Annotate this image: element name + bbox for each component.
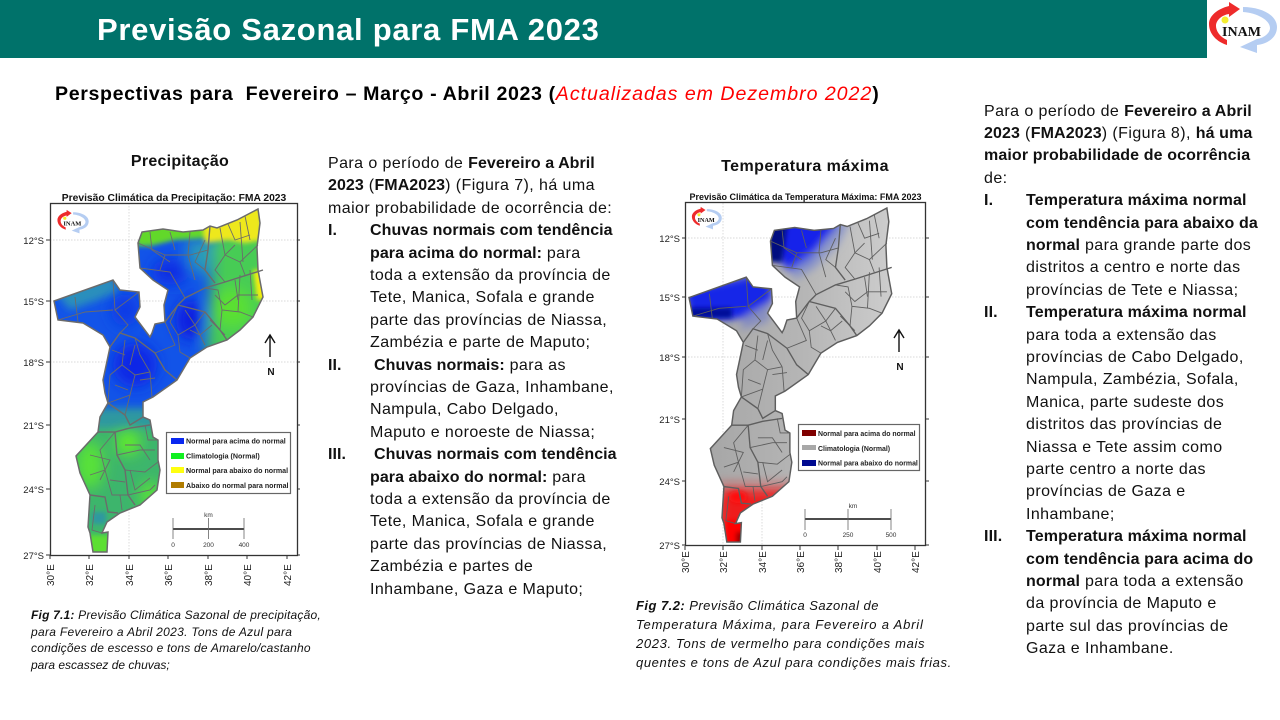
y axis labels: precipitation map xyxy=(23,236,44,562)
caption: figure 7.1: para Fevereiro a Abril 2023. Tons de Azul para xyxy=(31,625,292,639)
text block: temperature outlook: II. xyxy=(984,304,998,321)
x axis labels: temperature map: 36°E xyxy=(796,551,807,573)
header banner xyxy=(0,0,1280,58)
text block: precipitation outlook: toda a extensão da província de xyxy=(370,267,611,284)
legend: precipitation: Normal para acima do normal xyxy=(186,438,286,446)
text block: temperature outlook: províncias de Gaza e xyxy=(1026,483,1186,500)
x axis labels: temperature map: 30°E xyxy=(681,551,692,573)
heading: temperature map: Temperatura máxima xyxy=(721,158,889,175)
caption: figure 7.2: Temperatura Máxima, para Fevereiro a Abril xyxy=(636,617,924,632)
scale bar: precipitation map: km xyxy=(204,512,213,519)
caption: figure 7.1: para escassez de chuvas; xyxy=(31,658,170,672)
x axis labels: temperature map xyxy=(681,551,922,573)
text block: precipitation outlook: 2023 (FMA2023) (Figura 7), há uma xyxy=(328,177,595,194)
x axis labels: precipitation map: 38°E xyxy=(204,564,215,586)
caption: figure 7.1: condições de escesso e tons de Amarelo/castanho xyxy=(31,641,311,655)
text block: precipitation outlook: para abaixo do normal: para xyxy=(370,469,586,486)
x axis labels: precipitation map: 30°E xyxy=(46,564,57,586)
text block: temperature outlook: distritos das províncias de xyxy=(1026,416,1222,433)
text block: precipitation outlook xyxy=(328,155,617,598)
text block: precipitation outlook: Chuvas normais: para as xyxy=(374,357,566,374)
heading: precipitation map: Precipitação xyxy=(131,153,229,170)
text block: precipitation outlook: Zambézia e parte de Maputo; xyxy=(370,334,590,351)
map fill: temperature colours xyxy=(690,210,891,542)
text block: temperature outlook: Temperatura máxima normal xyxy=(1026,304,1247,321)
text block: temperature outlook: distritos a centro e norte das xyxy=(1026,259,1240,276)
caption: figure 7.1: Fig 7.1: Previsão Climática Sazonal de precipitação, xyxy=(31,608,321,622)
axes frame: temperature map xyxy=(682,202,929,550)
text block: temperature outlook: com tendência para acima do xyxy=(1026,550,1253,568)
scale bar: temperature map: 500 xyxy=(886,532,897,539)
map lines: provinces and districts xyxy=(54,209,263,552)
text block: precipitation outlook: III. xyxy=(328,446,346,463)
north arrow: temperature map: N xyxy=(896,362,904,373)
text block: precipitation outlook: Inhambane, Gaza e Maputo; xyxy=(370,581,583,598)
text block: temperature outlook: Inhambane; xyxy=(1026,506,1115,523)
y axis labels: temperature map: 21°S xyxy=(659,415,680,426)
title: Previsão Sazonal para FMA 2023 xyxy=(97,12,600,47)
legend: precipitation: Climatologia (Normal) xyxy=(186,452,260,460)
text block: precipitation outlook: Chuvas normais com tendência xyxy=(374,446,617,463)
caption: figure 7.1 xyxy=(30,608,321,672)
text block: precipitation outlook: Para o período de Fevereiro a Abril xyxy=(328,155,595,172)
scale bar: precipitation map: 0 xyxy=(171,542,175,549)
x axis labels: temperature map: 32°E xyxy=(719,551,730,573)
north arrow: precipitation map: N xyxy=(267,367,275,378)
text block: temperature outlook: parte sul das províncias de xyxy=(1026,618,1229,635)
scale bar: precipitation map: 200 xyxy=(203,542,214,549)
grid lines: precipitation map xyxy=(50,203,297,555)
map lines: provinces and districts xyxy=(689,208,892,542)
text block: temperature outlook: Manica, parte sudeste dos xyxy=(1026,394,1224,411)
map: seasonal maximum temperature forecast xyxy=(659,192,929,573)
icon: INAM logo on precipitation map: INAM xyxy=(63,221,81,228)
y axis labels: precipitation map: 24°S xyxy=(23,485,44,496)
x axis labels: temperature map: 34°E xyxy=(758,551,769,573)
legend: temperature: Normal para acima do normal xyxy=(818,431,916,438)
text block: temperature outlook: normal para grande parte dos xyxy=(1026,237,1251,254)
legend: precipitation: Abaixo do normal para normal xyxy=(186,482,289,490)
text block: precipitation outlook: toda a extensão da província de xyxy=(370,491,611,508)
y axis labels: precipitation map: 12°S xyxy=(23,236,44,247)
y axis labels: temperature map: 24°S xyxy=(659,477,680,488)
caption: figure 7.2: Fig 7.2: Previsão Climática Sazonal de xyxy=(636,598,879,612)
text block: temperature outlook: normal para toda a extensão xyxy=(1026,573,1244,590)
subtitle heading: Perspectivas para Fevereiro – Março - Abril 2023 (Actualizadas em Dezembro 2022) xyxy=(55,83,879,105)
text block: precipitation outlook: para acima do normal: para xyxy=(370,245,581,262)
y axis labels: precipitation map: 15°S xyxy=(23,297,44,308)
text block: precipitation outlook: parte das províncias de Niassa, xyxy=(370,312,607,329)
text block: temperature outlook: Niassa e Tete assim como xyxy=(1026,438,1223,456)
scale bar: temperature map: 250 xyxy=(843,532,854,539)
text block: temperature outlook: maior probabilidade de ocorrência xyxy=(984,147,1250,164)
y axis labels: temperature map: 18°S xyxy=(659,353,680,364)
caption: figure 7.2 xyxy=(636,598,952,670)
x axis labels: temperature map: 38°E xyxy=(834,551,845,573)
scale bar: temperature map xyxy=(803,503,897,539)
text block: temperature outlook: Temperatura máxima normal xyxy=(1026,192,1247,209)
text block: temperature outlook: províncias de Tete e Niassa; xyxy=(1026,282,1238,299)
icon: INAM logo on temperature map xyxy=(692,207,722,229)
text block: precipitation outlook: I. xyxy=(328,222,337,239)
scale bar: temperature map: 0 xyxy=(803,532,807,539)
map: seasonal precipitation forecast xyxy=(24,194,929,586)
text block: temperature outlook: de: xyxy=(984,170,1008,187)
caption: figure 7.2: quentes e tons de Azul para condições mais frias. xyxy=(636,655,952,670)
scale bar: precipitation map: 400 xyxy=(239,542,250,549)
text block: temperature outlook: com tendência para abaixo da xyxy=(1026,214,1258,232)
scale bar: temperature map: km xyxy=(849,503,857,510)
y axis labels: temperature map: 15°S xyxy=(659,293,680,304)
text block: precipitation outlook: Chuvas normais com tendência xyxy=(370,222,613,239)
text block: precipitation outlook: Nampula, Cabo Delgado, xyxy=(370,401,559,418)
y axis labels: temperature map: 27°S xyxy=(659,541,680,552)
north arrow: precipitation map xyxy=(265,335,275,378)
x axis labels: precipitation map: 42°E xyxy=(283,564,294,586)
grid lines: temperature map xyxy=(685,203,926,545)
chart title: precipitation: Previsão Climática da Precipitação: FMA 2023 xyxy=(62,193,287,204)
text block: precipitation outlook: parte das províncias de Niassa, xyxy=(370,536,607,553)
legend: temperature xyxy=(798,424,920,470)
text block: precipitation outlook: Tete, Manica, Sofala e grande xyxy=(370,513,595,530)
x axis labels: precipitation map: 32°E xyxy=(85,564,96,586)
x axis labels: precipitation map: 34°E xyxy=(125,564,136,586)
x axis labels: precipitation map xyxy=(46,564,294,586)
text block: temperature outlook: Temperatura máxima normal xyxy=(1026,528,1247,545)
text block: temperature outlook: da província de Maputo e xyxy=(1026,595,1217,612)
text block: temperature outlook: parte centro a norte das xyxy=(1026,461,1206,478)
x axis labels: temperature map: 42°E xyxy=(911,551,922,573)
text block: precipitation outlook: Tete, Manica, Sofala e grande xyxy=(370,289,595,306)
text block: temperature outlook: III. xyxy=(984,528,1002,545)
text block: temperature outlook: para toda a extensão das xyxy=(1026,326,1217,344)
text block: temperature outlook: 2023 (FMA2023) (Figura 8), há uma xyxy=(984,125,1252,142)
x axis labels: precipitation map: 36°E xyxy=(164,564,175,586)
legend: temperature: Climatologia (Normal) xyxy=(818,446,890,453)
y axis labels: temperature map: 12°S xyxy=(659,234,680,245)
north arrow: temperature map xyxy=(894,330,904,373)
text block: temperature outlook: Gaza e Inhambane. xyxy=(1026,640,1174,657)
text block: precipitation outlook: províncias de Gaza, Inhambane, xyxy=(370,379,614,396)
x axis labels: precipitation map: 40°E xyxy=(243,564,254,586)
legend: precipitation xyxy=(166,432,290,494)
y axis labels: precipitation map: 18°S xyxy=(23,358,44,369)
caption: figure 7.2: 2023. Tons de vermelho para condições mais xyxy=(636,636,925,651)
chart title: temperature: Previsão Climática da Temperatura Máxima: FMA 2023 xyxy=(689,192,922,202)
scale bar: precipitation map xyxy=(171,512,250,549)
text block: precipitation outlook: maior probabilidade de ocorrência de: xyxy=(328,200,612,217)
text block: temperature outlook: I. xyxy=(984,192,993,209)
text block: precipitation outlook: Maputo e noroeste de Niassa; xyxy=(370,424,595,441)
icon: INAM logo on precipitation map xyxy=(57,210,89,233)
y axis labels: precipitation map: 21°S xyxy=(23,421,44,432)
text block: precipitation outlook: II. xyxy=(328,357,342,374)
text block: temperature outlook: Nampula, Zambézia, Sofala, xyxy=(1026,371,1239,388)
icon: INAM logo xyxy=(1207,0,1280,58)
map fill: precipitation colours xyxy=(54,210,262,552)
text block: temperature outlook xyxy=(984,102,1258,657)
y axis labels: precipitation map: 27°S xyxy=(23,551,44,562)
icon: INAM logo: INAM xyxy=(1222,25,1261,40)
text block: precipitation outlook: Zambézia e partes de xyxy=(370,558,533,575)
y axis labels: temperature map xyxy=(659,234,680,552)
text block: temperature outlook: Para o período de Fevereiro a Abril xyxy=(984,102,1252,120)
legend: precipitation: Normal para abaixo do normal xyxy=(186,467,288,475)
legend: temperature: Normal para abaixo do normal xyxy=(818,460,918,468)
x axis labels: temperature map: 40°E xyxy=(873,551,884,573)
icon: INAM logo on temperature map: INAM xyxy=(698,218,715,224)
axes frame: precipitation map xyxy=(46,204,300,559)
text block: temperature outlook: províncias de Cabo Delgado, xyxy=(1026,349,1244,366)
